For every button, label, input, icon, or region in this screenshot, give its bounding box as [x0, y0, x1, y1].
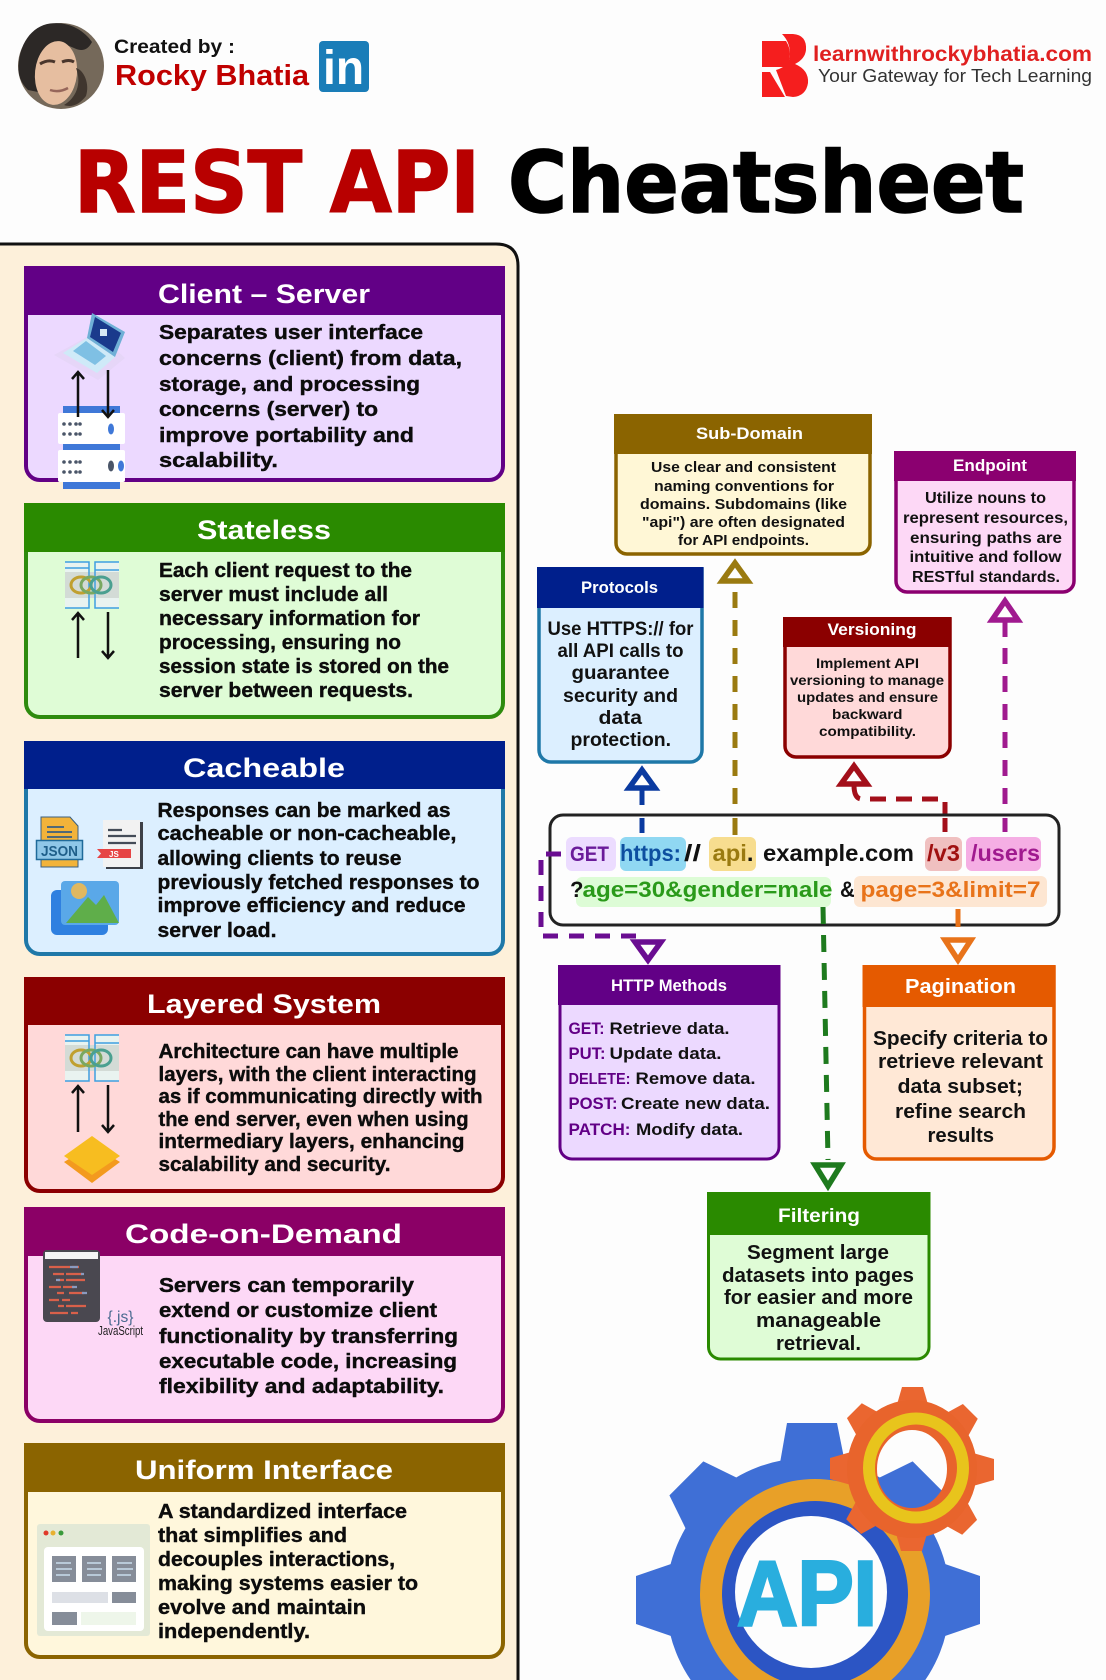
text block: Utilize nouns to: [925, 490, 1046, 507]
token: resource: [966, 837, 1041, 871]
text block: making systems easier to: [158, 1573, 418, 1595]
panel: protocols: [537, 567, 704, 762]
illustration: API gears: [636, 1387, 994, 1680]
text: website: learnwithrockybhatia.com: [813, 43, 1092, 66]
text block: intermediary layers, enhancing: [158, 1131, 464, 1153]
icon: javascript label: {.js}: [108, 1309, 134, 1326]
icon: json file: JSON: [41, 843, 78, 860]
token: version: [925, 837, 962, 871]
API lettering: API: [737, 1543, 877, 1645]
text: created by: Created by :: [114, 37, 235, 58]
text block: [548, 619, 694, 751]
text block: improve portability and: [159, 425, 414, 447]
token: domain: example.com: [763, 840, 914, 866]
text block: versioning to manage: [790, 672, 944, 688]
heading: Client – Server: [158, 279, 371, 309]
text block: [158, 1501, 418, 1643]
text block: "api") are often designated: [642, 514, 845, 531]
text block: [159, 322, 462, 472]
card: code on demand: [24, 1207, 505, 1421]
text block: Use HTTPS:// for: [548, 619, 694, 640]
arrow stubs over url box: [642, 818, 1005, 835]
token: ampersand: &: [840, 877, 855, 902]
text block: compatibility.: [819, 723, 916, 739]
text block: necessary information for: [159, 608, 420, 630]
inner blue ring: [722, 1501, 908, 1680]
icon: RB logo: [762, 34, 808, 97]
title: [74, 134, 1024, 233]
card: layered system: [24, 977, 505, 1191]
text block: scalability and security.: [158, 1154, 390, 1176]
text block: Responses can be marked as: [158, 800, 450, 822]
token: api: api.: [712, 840, 754, 866]
text block: Servers can temporarily: [159, 1275, 415, 1297]
token: GET: [566, 837, 616, 871]
text block: flexibility and adaptability.: [159, 1376, 444, 1398]
text block: server must include all: [159, 584, 388, 606]
heading: Stateless: [197, 515, 331, 545]
text block: datasets into pages: [722, 1265, 914, 1287]
text block: refine search: [895, 1101, 1026, 1123]
token: pagination query: page=3&limit=7: [860, 877, 1040, 902]
token: resource: /users: [971, 840, 1040, 866]
panel: request url: [550, 815, 1059, 925]
text block: guarantee: [572, 663, 670, 684]
card: stateless: [24, 503, 505, 717]
text block: evolve and maintain: [158, 1597, 366, 1619]
arrow: versioning: [841, 766, 945, 832]
icon: js file: JS: [109, 850, 119, 859]
arrow: sub-domain: [722, 563, 748, 835]
text block: previously fetched responses to: [158, 872, 480, 894]
method list: Create new data.: [621, 1094, 770, 1113]
token: version: /v3: [927, 840, 960, 866]
text block: layers, with the client interacting: [158, 1064, 476, 1086]
arrow: pagination: [945, 909, 971, 960]
heading: Layered System: [147, 989, 381, 1019]
method list: DELETE:: [568, 1071, 630, 1088]
text block: the end server, even when using: [158, 1109, 468, 1131]
text block: retrieval.: [776, 1333, 861, 1355]
icon: creator portrait: [18, 23, 104, 109]
title: REST API: [74, 134, 480, 233]
text block: domains. Subdomains (like: [640, 496, 847, 513]
text block: cacheable or non-cacheable,: [158, 823, 456, 845]
icon: code window: [43, 1250, 100, 1322]
heading: Uniform Interface: [135, 1455, 393, 1485]
text block: retrieve relevant: [878, 1051, 1043, 1073]
arrow: http methods: [541, 854, 661, 960]
icon: linked windows with arrows: [65, 562, 119, 658]
panel: http methods: [558, 965, 780, 1159]
method list: POST:: [568, 1094, 618, 1113]
token: https: [620, 837, 702, 871]
text block: data subset;: [898, 1076, 1023, 1098]
icon: json file: [36, 817, 82, 867]
header: brand: [762, 34, 1092, 97]
text block: RESTful standards.: [912, 569, 1060, 586]
heading: Pagination: [905, 976, 1016, 998]
text block: security and: [563, 686, 678, 707]
text block: ensuring paths are: [910, 530, 1062, 547]
text block: [158, 1041, 482, 1176]
text block: all API calls to: [558, 641, 684, 662]
large blue gear: [636, 1423, 980, 1680]
text block: scalability.: [159, 450, 278, 472]
small orange gear: [830, 1387, 994, 1551]
icon: linkedin: in: [323, 42, 364, 95]
text block: [159, 1275, 458, 1398]
heading: HTTP Methods: [611, 976, 727, 995]
text block: [903, 490, 1068, 586]
text block: [790, 655, 944, 739]
text block: Implement API: [816, 655, 919, 671]
text block: Segment large: [747, 1242, 889, 1264]
text block: Specify criteria to: [873, 1028, 1048, 1050]
token: https: //: [684, 840, 702, 866]
method list: Modify data.: [636, 1120, 743, 1139]
text block: [158, 800, 480, 942]
heading: Filtering: [778, 1206, 860, 1227]
text block: allowing clients to reuse: [158, 848, 402, 870]
card: cacheable: [24, 741, 505, 954]
text block: [640, 459, 847, 549]
heading: Protocols: [581, 578, 658, 597]
heading: Sub-Domain: [696, 424, 803, 443]
text block: [159, 560, 449, 702]
method list: GET:: [568, 1019, 604, 1038]
text block: protection.: [570, 730, 671, 751]
text block: intuitive and follow: [910, 549, 1062, 566]
text: author name: Rocky Bhatia: [115, 60, 310, 92]
card: uniform interface: [24, 1443, 505, 1657]
panel: endpoint: [894, 451, 1076, 592]
text block: for API endpoints.: [678, 532, 809, 549]
header: creator: [18, 23, 369, 109]
method list: PUT:: [568, 1044, 606, 1063]
icon: javascript label: [98, 1309, 143, 1338]
panel: sub-domain: [614, 414, 872, 554]
text block: represent resources,: [903, 510, 1068, 527]
heading: Cacheable: [183, 753, 345, 783]
text block: executable code, increasing: [159, 1351, 457, 1373]
token: api: [709, 837, 756, 871]
text block: server between requests.: [159, 680, 413, 702]
token: filter query: ?: [570, 877, 583, 902]
token: filter query: age=30&gender=male: [582, 877, 832, 902]
token: GET: GET: [570, 843, 609, 866]
token: https: https:: [620, 840, 681, 866]
text block: manageable: [756, 1310, 881, 1332]
text block: Use clear and consistent: [651, 459, 836, 476]
text block: A standardized interface: [158, 1501, 407, 1523]
method list: PATCH:: [568, 1120, 630, 1139]
text block: concerns (server) to: [159, 399, 378, 421]
text block: for easier and more: [724, 1287, 913, 1309]
icon: laptop and servers: [54, 313, 125, 489]
text: tagline: Your Gateway for Tech Learning: [818, 66, 1092, 86]
text block: independently.: [158, 1621, 310, 1643]
text block: Architecture can have multiple: [158, 1041, 458, 1063]
token: pagination query: [854, 876, 1047, 907]
heading: Versioning: [828, 620, 916, 639]
panel: filtering: [707, 1192, 930, 1359]
text block: data: [598, 708, 642, 729]
title: Cheatsheet: [508, 134, 1024, 233]
text block: extend or customize client: [159, 1300, 437, 1322]
heading: Endpoint: [953, 456, 1027, 475]
text block: functionality by transferring: [159, 1326, 458, 1348]
text block: as if communicating directly with: [158, 1086, 482, 1108]
text block: processing, ensuring no: [159, 632, 401, 654]
text block: updates and ensure: [797, 689, 938, 705]
text block: [873, 1028, 1048, 1147]
gear hole: [735, 1516, 887, 1668]
heading: Code-on-Demand: [125, 1219, 402, 1249]
method list: Remove data.: [636, 1069, 756, 1088]
text block: backward: [832, 706, 902, 722]
text block: Separates user interface: [159, 322, 423, 344]
text block: Each client request to the: [159, 560, 412, 582]
text block: session state is stored on the: [159, 656, 449, 678]
card: client server: [24, 266, 505, 489]
orange ring: [700, 1479, 930, 1680]
text block: results: [928, 1125, 994, 1147]
panel: pagination: [862, 965, 1056, 1159]
text block: storage, and processing: [159, 374, 420, 396]
icon: interface window: [37, 1524, 150, 1636]
method list: [568, 1019, 770, 1139]
text block: [722, 1242, 914, 1355]
icon: js file: [97, 820, 143, 869]
arrow: filtering: [815, 907, 841, 1186]
method list: Update data.: [610, 1044, 722, 1063]
text block: naming conventions for: [654, 478, 834, 495]
text block: improve efficiency and reduce: [158, 895, 466, 917]
panel: REST principles: [0, 244, 518, 1680]
text block: server load.: [158, 920, 276, 942]
text block: that simplifies and: [158, 1525, 347, 1547]
text block: concerns (client) from data,: [159, 348, 462, 370]
icon: image: [51, 881, 119, 935]
panel: versioning: [783, 617, 952, 757]
icon: linked windows, arrows and layers: [64, 1035, 120, 1183]
arrow: endpoint: [992, 601, 1018, 832]
method list: Retrieve data.: [610, 1019, 730, 1038]
icon: javascript label: JavaScript: [98, 1324, 143, 1338]
text block: decouples interactions,: [158, 1549, 395, 1571]
arrow: protocols: [629, 770, 655, 833]
